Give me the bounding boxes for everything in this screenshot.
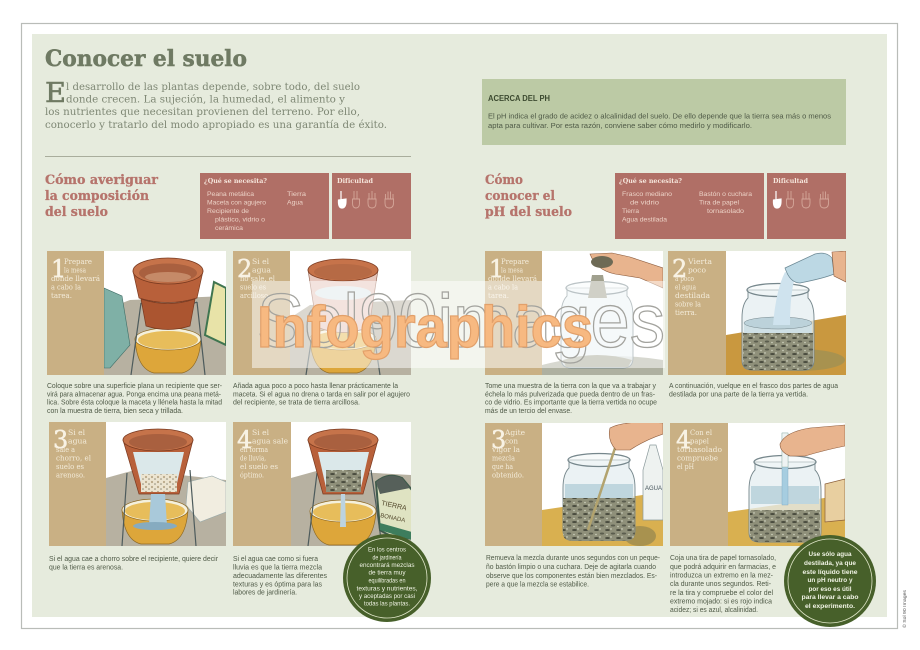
step: pH 3: con: [505, 438, 518, 446]
caption: pH 3: ño bastón limpio o una cuchara. Deje de agitarla cuando: [486, 564, 656, 571]
intro text: [45, 78, 387, 131]
caption: pH 2: destilada por una parte de la tierra ya vertida.: [669, 391, 808, 398]
callout: centros de jardinería: encontrará mezclas: [360, 562, 415, 569]
intro text: los nutrientes que necesitan provienen del terreno. Por ello,: [45, 106, 360, 118]
callout: centros de jardinería: todas las plantas.: [364, 600, 410, 608]
step: composición 4: en forma: [240, 446, 268, 454]
caption: pH 1: [485, 383, 657, 415]
step: composición 2: 2: [237, 255, 252, 283]
callout: centros de jardinería: de jardinería: [372, 554, 402, 562]
step: pH 4: el pH: [677, 463, 694, 471]
step: pH 4: compruebe: [677, 454, 718, 462]
panel: qué se necesita, composición: cerámica: [215, 225, 243, 232]
callout: agua destilada: este líquido tiene: [802, 569, 858, 576]
step: composición 3: 3: [53, 426, 68, 454]
step: composición 4: Si el: [252, 429, 270, 437]
heading: pH del suelo: conocer el: [485, 189, 555, 204]
step: pH 3: 3: [491, 426, 506, 454]
step: pH 2: poco: [688, 266, 706, 274]
caption: composición 2: del recipiente, se trata de tierra arcillosa.: [233, 400, 360, 407]
step: pH 4: papel: [690, 438, 710, 446]
callout: agua destilada: por eso es útil: [808, 586, 852, 593]
panel: qué se necesita, pH: tornasolado: [707, 208, 744, 215]
panel: dificultad, composición: Dificultad: [337, 178, 374, 185]
panel: acerca del pH: El pH indica el grado de acidez o alcalinidad del suelo. De ello depende que la tierra sea más o menos: [488, 114, 832, 120]
intro text: l desarrollo de las plantas depende, sobre todo, del suelo: [66, 81, 360, 93]
caption: composición 3: [49, 556, 219, 572]
watermark: Sol90images: [257, 279, 665, 364]
caption: composición 2: Añada agua poco a poco hasta llenar prácticamente la: [233, 383, 398, 390]
step: pH 2: tierra.: [675, 309, 697, 317]
step: composición 2: no sale, el: [240, 275, 276, 283]
step: composición 3: suelo es: [56, 463, 84, 471]
caption: pH 3: pere a que la mezcla se estabilice.: [486, 582, 589, 588]
step: pH 4: tornasolado: [677, 446, 722, 454]
step: pH 2: destilada: [675, 292, 710, 300]
step: composición 1: donde llevará: [51, 275, 100, 283]
panel: qué se necesita, composición: Agua: [287, 200, 303, 206]
step: composición 2: [233, 251, 411, 375]
callout: centros de jardinería: texturas y nutrientes,: [356, 586, 418, 592]
step: composición 3: agua: [68, 438, 87, 446]
step: composición 4: TIERRA: [381, 500, 407, 512]
caption: composición 4: lluvia es que la tierra mezcla: [233, 564, 322, 572]
panel: qué se necesita, pH: de vidrio: [630, 200, 659, 206]
caption: composición 4: labores de jardinería.: [233, 590, 297, 597]
step: pH 3: que ha: [492, 463, 513, 471]
caption: pH 1: más de un tercio del envase.: [485, 408, 572, 415]
panel: dificultad, pH: Dificultad: [773, 178, 809, 185]
heading: composición del suelo: la composición: [45, 189, 150, 204]
step: pH 3: [485, 422, 663, 546]
panel: dificultad, composición: [332, 173, 411, 239]
caption: pH 1: co de vidrio. Es importante que la tierra vertida no ocupe: [485, 400, 657, 407]
step: pH 4: 4: [676, 426, 691, 454]
panel: qué se necesita, pH: Bastón o cuchara: [699, 191, 752, 198]
caption: pH 1: échela lo más pulverizada que pueda dentro de un fras-: [485, 391, 656, 398]
step: composición 3: [49, 422, 226, 546]
caption: pH 4: acidez; si es azul, alcalinidad.: [670, 607, 758, 614]
step: pH 1: 1: [489, 255, 504, 283]
step: pH 2: el agua: [675, 284, 696, 292]
step: composición 2: arcilloso.: [240, 292, 270, 300]
intro text: conocerlo y tratarlo del modo apropiado es una garantía de éxito.: [45, 119, 387, 131]
step: composición 4: agua sale: [252, 438, 288, 446]
step: pH 2: Vierta: [687, 258, 712, 266]
caption: pH 4: [670, 555, 776, 614]
step: composición 3: sale a: [56, 446, 75, 454]
step: composición 4: óptimo.: [240, 472, 264, 480]
caption: composición 3: Si el agua cae a chorro sobre el recipiente, quiere decir: [49, 556, 219, 563]
step: pH 2: a poco: [675, 275, 694, 283]
caption: pH 4: Coja una tira de papel tornasolado,: [670, 555, 776, 562]
panel: qué se necesita, composición: plástico, vidrio o: [215, 216, 265, 224]
panel: qué se necesita, composición: Peana metálica: [207, 191, 254, 198]
step: composición 1: Prepare: [64, 258, 92, 266]
caption: pH 3: observe que los componentes están bien mezclados. Es-: [486, 573, 658, 580]
step: composición 4: de lluvia,: [240, 454, 266, 462]
caption: composición 4: adecuadamente las diferentes: [233, 573, 327, 580]
panel: dificultad, pH: [767, 173, 846, 239]
panel: qué se necesita, pH: ¿Qué se necesita?: [619, 178, 683, 185]
caption: composición 4: texturas y es óptima para las: [233, 581, 322, 588]
caption: pH 2: [669, 383, 838, 398]
step: pH 1: tarea.: [488, 292, 509, 300]
panel: qué se necesita, composición: Tierra: [287, 191, 306, 198]
panel: qué se necesita, pH: [615, 173, 764, 239]
callout: agua destilada: el experimento.: [805, 603, 855, 610]
step: pH 3: obtenido.: [492, 472, 524, 480]
panel: acerca del pH: apta para cultivar. Por esta razón, conviene saber cómo medirlo y modificarlo.: [488, 123, 752, 130]
step: pH 1: [485, 251, 663, 375]
step: composición 3: chorro, el: [56, 454, 92, 462]
caption: pH 2: A continuación, vuelque en el frasco dos partes de agua: [669, 383, 838, 390]
callout: agua destilada: para llevar a cabo: [802, 594, 858, 601]
caption: composición 1: Coloque sobre una superficie plana un recipiente que ser-: [47, 383, 223, 390]
panel: acerca del pH: [482, 79, 846, 145]
step: pH 3: Agite: [504, 429, 525, 437]
caption: composición 4: Si el agua cae como si fuera: [233, 556, 318, 563]
step: pH 2: sobre la: [675, 300, 701, 308]
step: pH 3: AGUA: [645, 486, 662, 492]
callout: centros de jardinería: y aceptadas por casi: [359, 593, 415, 600]
step: pH 1: Prepare: [501, 258, 529, 266]
heading: composición del suelo: Cómo averiguar: [45, 173, 158, 188]
caption: pH 4: introduzca un extremo en la mez-: [670, 572, 774, 580]
step: pH 3: vigor la: [491, 446, 520, 454]
caption: pH 1: Tome una muestra de la tierra con la que va a trabajar y: [485, 383, 656, 390]
heading: pH del suelo: [485, 173, 572, 220]
step: pH 2: 2: [672, 255, 687, 283]
caption: composición 4: [233, 556, 327, 597]
step: pH 2: [668, 251, 846, 375]
step: composición 2: suelo es: [240, 284, 266, 292]
caption: composición 2: [233, 383, 410, 407]
intro text: E: [45, 78, 66, 109]
caption: pH 4: que podrá adquirir en farmacias, e: [670, 564, 776, 571]
caption: pH 4: extremo mojado: si es rojo indica: [670, 598, 772, 606]
step: composición 3: Si el: [68, 429, 86, 437]
caption: composición 1: con la muestra de tierra, bien seca y trillada.: [47, 408, 183, 415]
step: composición 4: 4: [237, 426, 252, 454]
callout: centros de jardinería: En los centros: [368, 546, 407, 554]
step: composición 1: la mesa: [64, 266, 86, 274]
panel: qué se necesita, composición: ¿Qué se necesita?: [204, 178, 268, 185]
panel: qué se necesita, pH: Frasco mediano: [622, 191, 672, 198]
step: pH 1: la mesa: [501, 266, 523, 274]
heading: composición del suelo: del suelo: [45, 205, 108, 220]
panel: qué se necesita, composición: Recipiente de: [207, 208, 249, 215]
heading: pH del suelo: Cómo: [485, 173, 523, 188]
intro text: donde crecen. La sujeción, la humedad, el alimento y: [66, 94, 345, 106]
caption: pH 4: re la tira y compruebe el color del: [670, 590, 773, 597]
step: composición 4: [233, 422, 412, 546]
step: composición 1: [47, 251, 226, 375]
heading: pH del suelo: pH del suelo: [485, 205, 572, 220]
step: composición 1: 1: [51, 255, 66, 283]
panel: qué se necesita, pH: Agua destilada: [622, 216, 667, 224]
callout: centros de jardinería: equilibradas en: [368, 578, 406, 584]
caption: composición 1: lica. Sobre ésta coloque la maceta y llénela hasta la mitad: [47, 400, 222, 407]
caption: composición 1: [47, 383, 223, 415]
caption: composición 2: maceta. Si el agua no drena o tarda en salir por el agujero: [233, 391, 410, 398]
callout: centros de jardinería: de tierra muy: [368, 570, 406, 576]
step: composición 2: agua: [252, 266, 271, 274]
step: composición 2: Si el: [252, 258, 270, 266]
caption: composición 1: virá para almacenar agua. Ponga encima una peana metá-: [47, 391, 222, 398]
watermark: Infographics: [257, 295, 593, 360]
step: pH 3: mezcla: [492, 454, 515, 462]
panel: acerca del pH: ACERCA DEL PH: [488, 94, 550, 103]
callout: agua destilada: Use sólo agua: [808, 551, 852, 558]
step: composición 1: tarea.: [51, 292, 72, 300]
callout: centros de jardinería: [343, 534, 431, 622]
step: composición 4: BONADA: [380, 513, 406, 524]
caption: pH 3: [486, 555, 661, 588]
callout: agua destilada: [784, 535, 876, 627]
caption: pH 4: cla durante unos segundos. Reti-: [670, 581, 772, 588]
panel: qué se necesita, composición: [200, 173, 329, 239]
step: composición 4: el suelo es: [240, 463, 278, 471]
callout: agua destilada: un pH neutro y: [808, 577, 853, 584]
heading: composición del suelo: [45, 173, 158, 220]
title: Conocer el suelo: [45, 46, 247, 72]
caption: composición 3: que la tierra es arenosa.: [49, 564, 123, 572]
step: pH 1: a cabo la: [488, 284, 518, 292]
step: pH 4: [670, 423, 845, 546]
panel: qué se necesita, composición: Maceta con agujero: [207, 200, 266, 206]
caption: pH 3: Remueva la mezcla durante unos segundos con un peque-: [486, 555, 661, 562]
step: pH 1: donde llevará: [488, 275, 537, 283]
credit: © Sol 90 Images: [901, 589, 907, 628]
step: composición 1: a cabo la: [51, 284, 81, 292]
step: pH 4: Con el: [690, 429, 713, 437]
callout: agua destilada: destilada, ya que: [804, 560, 856, 567]
panel: qué se necesita, pH: Tierra: [622, 208, 639, 215]
step: composición 3: arenoso.: [56, 472, 85, 480]
panel: qué se necesita, pH: Tira de papel: [699, 200, 740, 206]
